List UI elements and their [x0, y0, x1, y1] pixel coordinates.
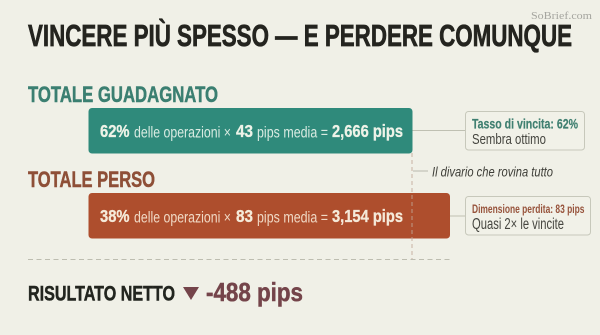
heading: total lost: TOTALE PERSO — [28, 167, 155, 192]
connector: win bar to callout — [412, 130, 465, 132]
bar: total lost: 3,154 pips — [332, 206, 403, 226]
callout: loss size: Quasi 2× le vincite — [472, 216, 564, 233]
bar: total lost — [88, 193, 450, 238]
net result value: -488 pips — [206, 277, 303, 307]
icon: down triangle — [183, 287, 199, 300]
bar: total won: 43 — [236, 121, 253, 141]
bar: total lost: pips media = — [257, 210, 328, 226]
bar: total won: pips media = — [257, 124, 328, 142]
watermark: SoBrief.com — [531, 11, 592, 22]
bar: total won — [88, 108, 412, 154]
callout: win rate: Sembra ottimo — [472, 132, 546, 148]
gap marker: vertical dashed line — [411, 153, 413, 259]
bar: total lost: 38% — [100, 206, 130, 226]
bar: total won: delle operazioni × — [134, 124, 231, 142]
bar: total won: 62% — [100, 121, 130, 141]
callout: win rate — [466, 112, 584, 150]
bar: total won: 2,666 pips — [332, 121, 403, 141]
callout: loss size — [466, 196, 590, 235]
net result label: RISULTATO NETTO — [28, 282, 175, 306]
divider — [28, 258, 450, 260]
connector: loss bar to callout — [450, 215, 465, 217]
bar: total lost: 83 — [236, 206, 253, 226]
gap label: Il divario che rovina tutto — [432, 164, 553, 180]
bar: total lost: delle operazioni × — [134, 210, 231, 226]
heading: total won: TOTALE GUADAGNATO — [28, 82, 218, 107]
